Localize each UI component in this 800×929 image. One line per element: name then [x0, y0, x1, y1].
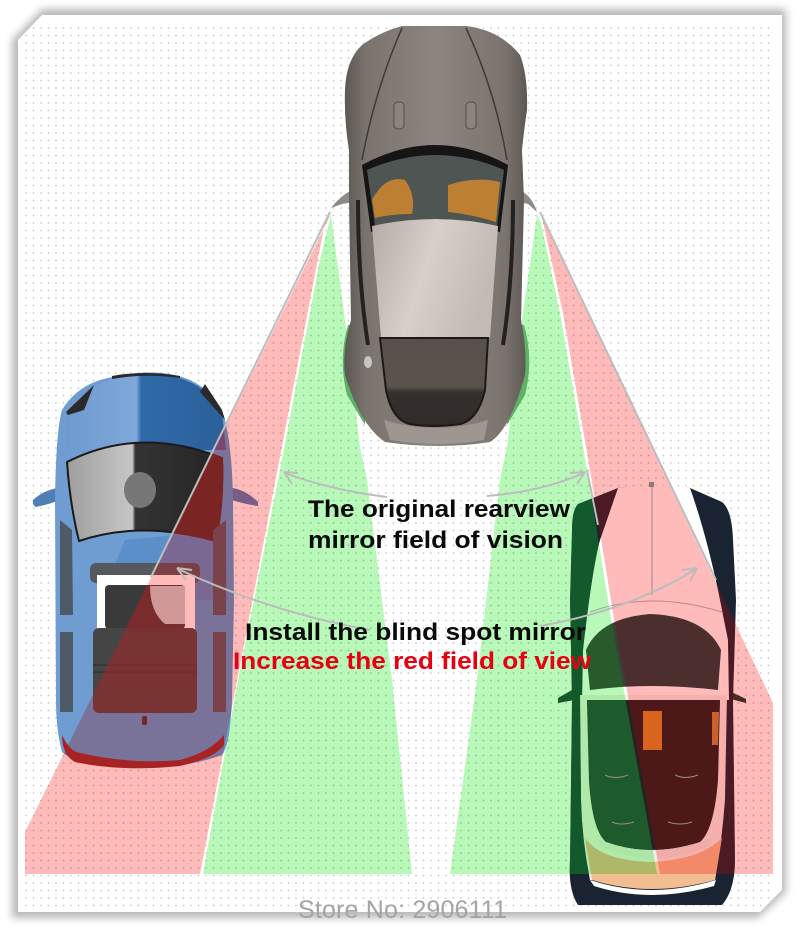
- headlights and grille: [66, 373, 225, 420]
- heading: original field of vision: [308, 496, 570, 554]
- rear opening interior: [105, 585, 185, 629]
- windshield: [586, 614, 721, 690]
- right green original field of vision: [450, 215, 657, 874]
- arrow: original view left: [284, 472, 387, 497]
- side window dark lines: [358, 200, 513, 345]
- mirrors of convertible: [558, 690, 746, 703]
- heading: increase red field: Increase the red field of view: [233, 648, 591, 675]
- hood of blue car: [66, 374, 226, 450]
- right red tint on dark car parts: [540, 212, 773, 874]
- left green original field of vision: [203, 215, 412, 874]
- roof: [372, 219, 498, 338]
- hood vents: [394, 102, 476, 129]
- mirrors of blue car: [33, 488, 258, 507]
- fuel cap: [364, 356, 372, 368]
- car: blue hatchback (left): [33, 372, 258, 768]
- left red field of view: [25, 214, 331, 874]
- cargo panel lines: [93, 665, 197, 672]
- rear window: [380, 338, 488, 426]
- rear handle: [142, 716, 147, 725]
- rear deck: [585, 838, 722, 889]
- outer body of convertible: [570, 486, 736, 905]
- arrow: blind spot left: [177, 568, 370, 630]
- orange seats: [372, 179, 500, 222]
- rear pale strip: [596, 838, 712, 858]
- store number watermark: Store No: 2906111: [298, 896, 507, 924]
- rear opening white frame: [97, 575, 195, 629]
- rear pale bumper: [384, 420, 488, 444]
- tail lights: [62, 735, 224, 768]
- convertible side trim: [712, 712, 719, 745]
- rear rim: [590, 880, 716, 895]
- sunroof frame: [90, 563, 200, 583]
- roof dark side: [100, 530, 228, 600]
- left red tint on dark car parts: [25, 214, 331, 874]
- seat backs: [150, 586, 185, 624]
- wing mirrors: [331, 190, 537, 212]
- cabin interior: [587, 700, 720, 850]
- green shade around rear arches: [343, 325, 529, 425]
- windshield frame: [362, 145, 508, 232]
- body of blue car: [55, 372, 234, 766]
- hood: [582, 486, 729, 700]
- windshield: [67, 442, 222, 541]
- cowl line: [590, 601, 722, 612]
- convertible center console: [643, 711, 662, 750]
- gray boundary lines along field edges: [151, 212, 716, 580]
- side windows: [60, 520, 226, 712]
- windshield glass: [367, 155, 504, 226]
- car: convertible (right): [558, 486, 746, 905]
- side rims: [580, 695, 727, 880]
- rear cargo panel: [93, 628, 197, 713]
- body: [344, 26, 527, 446]
- right green tint on dark car parts: [450, 215, 657, 874]
- car: gray sports car (top): [331, 26, 537, 446]
- hood lines: [362, 28, 507, 160]
- heading: original field of vision: mirror field of vision: [308, 527, 563, 554]
- heading: install blind spot mirror: Install the blind spot mirror: [245, 619, 586, 646]
- arrow: original view right: [487, 472, 585, 496]
- convertible antenna line: [649, 482, 654, 595]
- seat in windshield: [124, 472, 156, 508]
- right red field of view: [540, 212, 773, 874]
- convertible seat details: [605, 775, 698, 824]
- heading: original field of vision: The original rearview: [308, 496, 570, 523]
- arrow: blind spot right: [540, 568, 697, 626]
